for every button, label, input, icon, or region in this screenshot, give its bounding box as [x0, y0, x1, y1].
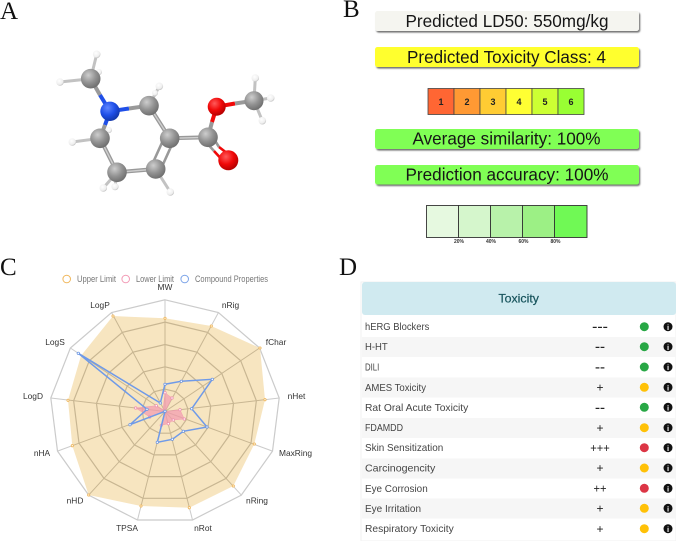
similarity colour scale: 80%	[550, 239, 561, 245]
row: DILI: DILI	[365, 362, 379, 374]
table header: Toxicity	[498, 292, 539, 306]
predicted toxicity class box: Predicted Toxicity Class: 4	[407, 47, 606, 67]
row: Respiratory Toxicity: i	[667, 525, 669, 534]
row: Respiratory Toxicity	[365, 522, 672, 536]
toxicity class colour scale: 5	[542, 97, 548, 107]
predicted LD50 box: Predicted LD50: 550mg/kg	[406, 11, 608, 31]
toxicity class colour scale: 1	[438, 97, 444, 107]
row: H-HT: H-HT	[365, 342, 388, 353]
row: hERG Blockers: hERG Blockers	[365, 322, 429, 333]
row: Eye Corrosion: Eye Corrosion	[365, 484, 428, 495]
row: Respiratory Toxicity: +	[596, 522, 604, 536]
radar axis labels: fChar	[266, 337, 286, 347]
row: Skin Sensitization: i	[667, 444, 669, 453]
radar axis labels: MW	[158, 282, 173, 292]
radar grid	[51, 300, 279, 520]
radar legend: Compound Properties	[195, 274, 268, 285]
similarity colour scale	[426, 206, 587, 245]
radar axis labels: nRing	[246, 496, 268, 506]
row: Skin Sensitization	[365, 441, 672, 455]
row: Eye Irritation: i	[667, 504, 669, 513]
toxicity class colour scale: 3	[490, 97, 496, 107]
alternating row shading	[362, 337, 676, 518]
row: AMES Toxicity: +	[596, 380, 604, 394]
lower limit area	[134, 392, 186, 426]
toxicity class colour scale: 6	[568, 97, 574, 107]
panel label C: C	[0, 254, 17, 281]
row: Rat Oral Acute Toxicity: --	[595, 402, 606, 414]
row: Skin Sensitization: Skin Sensitization	[365, 443, 444, 454]
row: Eye Irritation: +	[596, 502, 604, 516]
panel C: radar chart	[23, 274, 312, 533]
radar legend: Lower Limit	[136, 274, 174, 285]
similarity colour scale: 60%	[518, 239, 529, 245]
row: AMES Toxicity	[365, 380, 672, 394]
compound properties line	[77, 352, 214, 443]
panel A: 3D molecule model	[56, 50, 275, 196]
row: DILI	[365, 362, 672, 374]
radar axis labels: LogS	[45, 337, 65, 347]
toxicity class colour scale: 4	[516, 97, 522, 107]
row: Skin Sensitization: +++	[590, 441, 610, 455]
row: Respiratory Toxicity: Respiratory Toxicity	[365, 524, 454, 535]
row: Rat Oral Acute Toxicity: i	[667, 403, 669, 412]
row: Carcinogencity: +	[596, 461, 604, 475]
row: AMES Toxicity: AMES Toxicity	[365, 383, 427, 394]
row: H-HT: --	[595, 341, 606, 353]
row: hERG Blockers: ---	[592, 321, 609, 333]
prediction accuracy box: Prediction accuracy: 100%	[406, 164, 608, 184]
toxicity class colour scale	[428, 88, 584, 114]
radar axis labels	[23, 282, 312, 533]
radar axis labels: TPSA	[116, 523, 138, 533]
average similarity box: Average similarity: 100%	[412, 128, 600, 148]
table background	[361, 282, 676, 541]
row: Rat Oral Acute Toxicity: Rat Oral Acute Toxicity	[365, 403, 469, 414]
radar axis labels: LogP	[90, 300, 110, 310]
row: Carcinogencity: i	[667, 464, 669, 473]
radar axis labels: nRig	[222, 300, 239, 310]
row: Carcinogencity	[365, 461, 672, 475]
row: hERG Blockers	[365, 321, 672, 333]
row: Eye Corrosion	[365, 482, 672, 496]
panel D: toxicity table	[361, 282, 676, 541]
row: hERG Blockers: i	[667, 323, 669, 332]
radar legend	[63, 274, 268, 285]
row: FDAMDD	[365, 421, 672, 435]
row: DILI: --	[595, 362, 606, 374]
radar axis labels: nHet	[288, 391, 306, 401]
radar axis labels: nHD	[67, 496, 83, 506]
panel label D: D	[339, 254, 357, 281]
similarity colour scale: 40%	[486, 239, 497, 245]
row: Eye Corrosion: ++	[594, 482, 606, 496]
row: H-HT: i	[667, 343, 669, 352]
row: Eye Irritation: Eye Irritation	[365, 504, 421, 515]
row: H-HT	[365, 341, 672, 353]
upper limit area	[66, 314, 266, 510]
radar axis labels: nRot	[194, 523, 213, 533]
toxicity class colour scale: 2	[464, 97, 470, 107]
radar legend: Upper Limit	[77, 274, 116, 285]
similarity colour scale: 20%	[454, 239, 465, 245]
radar axis labels: MaxRing	[279, 448, 312, 458]
row: Carcinogencity: Carcinogencity	[365, 464, 436, 474]
row: Eye Irritation	[365, 502, 672, 516]
row: AMES Toxicity: i	[667, 383, 669, 392]
row: FDAMDD: i	[667, 424, 669, 433]
row: Eye Corrosion: i	[667, 484, 669, 493]
radar axis labels: LogD	[23, 391, 43, 401]
radar axis labels: nHA	[34, 448, 51, 458]
table header	[362, 282, 676, 315]
panel B: toxicity prediction	[375, 11, 639, 245]
row: Rat Oral Acute Toxicity	[365, 402, 672, 414]
row: DILI: i	[667, 363, 669, 372]
row: FDAMDD: +	[596, 421, 604, 435]
row: FDAMDD: FDAMDD	[365, 423, 403, 434]
